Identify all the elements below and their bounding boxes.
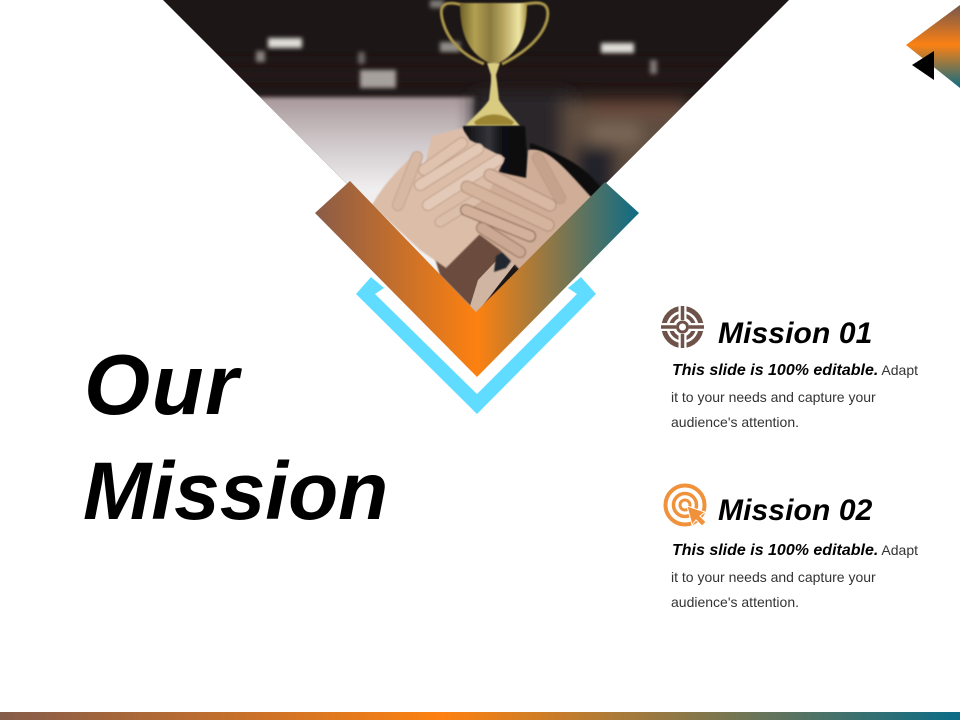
fingers — [398, 143, 560, 252]
trophy handles — [441, 3, 548, 64]
title: Our — [84, 338, 240, 433]
text block: mission 02 — [671, 542, 918, 610]
heading: mission 02: Mission 02 — [718, 494, 872, 527]
blurred ceiling lights — [256, 0, 657, 88]
trophy base — [463, 126, 528, 178]
text block: mission 02: audience's attention. — [671, 594, 799, 610]
text block: mission 01: audience's attention. — [671, 414, 799, 430]
text block: mission 01: it to your needs and capture your — [671, 389, 876, 405]
corner arrow: gradient shape — [906, 5, 960, 88]
blue chevron — [356, 277, 596, 414]
blurred poster — [560, 100, 690, 190]
text block: mission 02: it to your needs and capture your — [671, 569, 876, 585]
head and arm — [434, 234, 503, 306]
icon: crosshair target — [660, 305, 705, 349]
corner arrow: black triangle — [912, 51, 934, 80]
text block: mission 01 — [671, 362, 918, 430]
text block: mission 02: This slide is 100% editable. Adapt — [672, 542, 918, 559]
gradient chevron — [315, 181, 639, 377]
title: Mission — [83, 446, 388, 537]
trophy cup — [460, 3, 527, 65]
dark sleeve — [530, 143, 600, 196]
text block: mission 01: This slide is 100% editable. Adapt — [672, 362, 918, 379]
photo: hands holding trophy — [160, 0, 790, 327]
bright wall — [258, 94, 477, 306]
right hand — [462, 150, 592, 270]
bottom gradient bar — [0, 712, 960, 720]
heading: mission 01: Mission 01 — [718, 317, 872, 350]
icon: bullseye with arrow — [666, 486, 706, 526]
left hand — [372, 128, 505, 268]
trophy stem — [465, 63, 520, 126]
title — [83, 338, 388, 537]
